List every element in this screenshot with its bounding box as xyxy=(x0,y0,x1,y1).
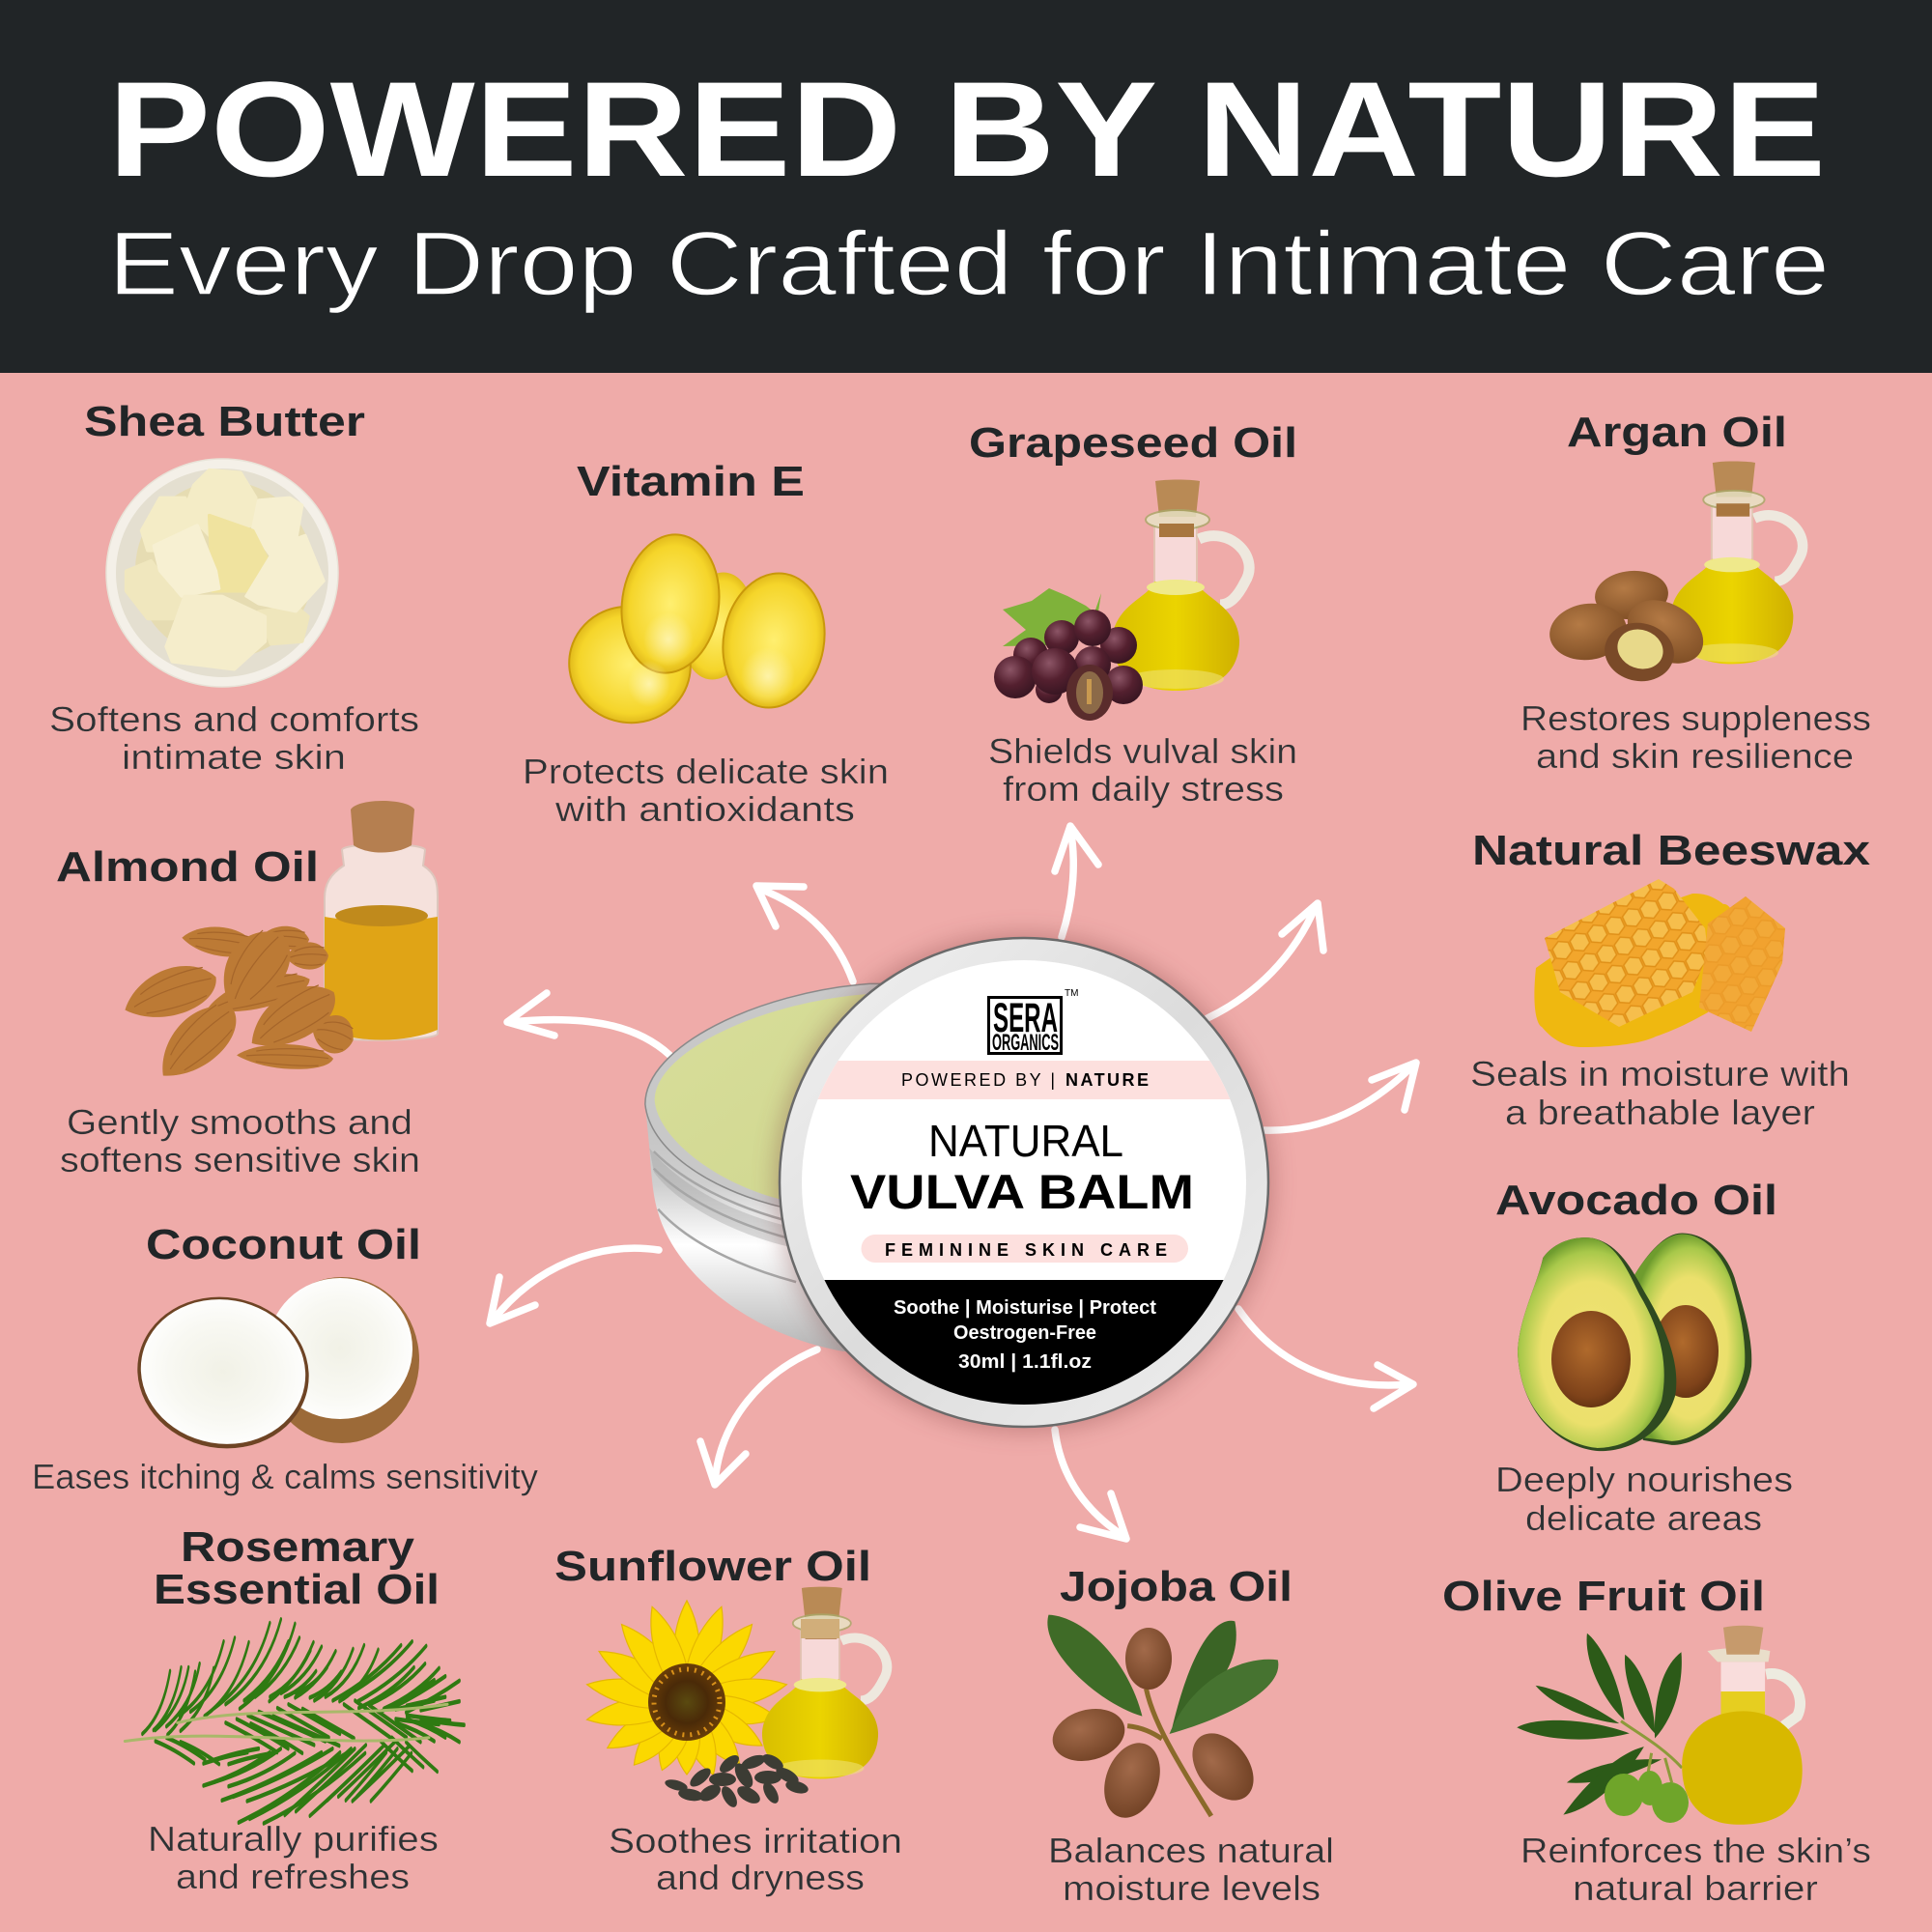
icon: avocado halves xyxy=(1518,1234,1751,1451)
description: Soothes irritation xyxy=(609,1821,902,1861)
heading: Jojoba Oil xyxy=(1060,1563,1293,1610)
heading: Grapeseed Oil xyxy=(969,419,1297,467)
description: and refreshes xyxy=(176,1857,410,1896)
brand logo: ORGANICS xyxy=(992,1030,1059,1056)
icon: almonds and oil jar xyxy=(117,801,438,1092)
label tagline: NATURE xyxy=(1065,1070,1149,1090)
description xyxy=(148,1819,439,1896)
arrow: to argan oil xyxy=(1208,903,1323,1018)
label product name: NATURAL xyxy=(928,1116,1123,1166)
heading: Vitamin E xyxy=(577,458,805,505)
description: and skin resilience xyxy=(1536,736,1854,776)
description: and dryness xyxy=(656,1858,865,1897)
arrow: to vitamin e xyxy=(756,886,853,981)
icon: shea butter bowl xyxy=(106,459,338,687)
heading: Rosemary xyxy=(181,1523,415,1571)
label pill xyxy=(862,1235,1188,1263)
label details: Oestrogen-Free xyxy=(953,1322,1096,1344)
heading: Almond Oil xyxy=(56,843,319,891)
arrow: to jojoba oil xyxy=(1055,1430,1126,1539)
label xyxy=(802,960,1246,1405)
brand logo xyxy=(989,988,1078,1056)
subtitle: Every Drop Crafted for Intimate Care xyxy=(108,213,1830,314)
description: Seals in moisture with xyxy=(1470,1054,1850,1094)
description xyxy=(1495,1460,1793,1538)
panel: sunflower oil xyxy=(554,1543,902,1897)
description: Restores suppleness xyxy=(1520,698,1871,738)
header banner xyxy=(0,0,1932,373)
heading: Essential Oil xyxy=(154,1566,440,1613)
label details: Soothe | Moisturise | Protect xyxy=(894,1297,1156,1319)
panel: olive fruit oil xyxy=(1442,1573,1871,1908)
icon: honeycomb xyxy=(1534,879,1785,1047)
heading: Argan Oil xyxy=(1567,409,1787,456)
description xyxy=(1520,698,1871,776)
title: POWERED BY NATURE xyxy=(108,53,1826,205)
panel: jojoba oil xyxy=(1047,1563,1334,1908)
heading: Natural Beeswax xyxy=(1472,827,1871,874)
description: intimate skin xyxy=(122,737,346,777)
panel: vitamin e xyxy=(523,458,889,829)
brand logo: SERA xyxy=(993,995,1058,1041)
description: from daily stress xyxy=(1003,769,1284,809)
product: balm tin xyxy=(645,933,1275,1432)
description: with antioxidants xyxy=(554,789,855,829)
arrow: to natural beeswax xyxy=(1264,1063,1416,1130)
arrow: to almond oil xyxy=(507,993,669,1055)
label product name: VULVA BALM xyxy=(850,1165,1194,1219)
description: Protects delicate skin xyxy=(523,752,889,791)
description: Eases itching & calms sensitivity xyxy=(32,1457,538,1496)
description: Deeply nourishes xyxy=(1495,1460,1793,1499)
description: softens sensitive skin xyxy=(60,1140,420,1179)
description xyxy=(1470,1054,1850,1132)
label product name xyxy=(850,1116,1194,1219)
label pill: FEMININE SKIN CARE xyxy=(885,1240,1167,1260)
description xyxy=(60,1102,420,1179)
label details xyxy=(894,1297,1156,1373)
icon: coconut halves xyxy=(126,1277,419,1462)
description: moisture levels xyxy=(1063,1868,1321,1908)
panel: shea butter xyxy=(49,398,419,777)
lid shadow xyxy=(775,933,1273,1432)
description xyxy=(523,752,889,829)
description: delicate areas xyxy=(1525,1498,1762,1538)
panel: avocado oil xyxy=(1495,1177,1793,1538)
brand logo: TM xyxy=(1065,988,1078,999)
panel: grapeseed oil xyxy=(969,419,1297,809)
icon: olive branch and oil jug xyxy=(1517,1626,1803,1825)
description xyxy=(988,731,1297,809)
icon: sunflower and oil jug xyxy=(584,1587,887,1809)
description xyxy=(1048,1831,1334,1908)
icon: grapes and oil jug xyxy=(994,479,1249,721)
description: Balances natural xyxy=(1048,1831,1334,1870)
label tagline: POWERED BY | xyxy=(901,1070,1055,1090)
panel: almond oil xyxy=(56,801,438,1179)
description xyxy=(1520,1831,1871,1908)
description: Softens and comforts xyxy=(49,699,419,739)
heading: Sunflower Oil xyxy=(554,1543,871,1590)
icon: argan nuts and oil jug xyxy=(1546,462,1803,687)
description: Reinforces the skin’s xyxy=(1520,1831,1871,1870)
label details: 30ml | 1.1fl.oz xyxy=(958,1351,1092,1373)
heading xyxy=(154,1523,440,1613)
description xyxy=(49,699,419,777)
label tagline xyxy=(901,1070,1149,1090)
icon: vitamin e capsules xyxy=(556,528,835,736)
description: natural barrier xyxy=(1573,1868,1818,1908)
description xyxy=(609,1821,902,1897)
open tin base xyxy=(645,983,973,1351)
arrow: to grapeseed oil xyxy=(1055,826,1098,937)
icon: rosemary sprig xyxy=(125,1619,465,1823)
panel: coconut oil xyxy=(32,1221,538,1496)
description: Naturally purifies xyxy=(148,1819,439,1859)
lid rim xyxy=(780,938,1268,1427)
panel: natural beeswax xyxy=(1470,827,1871,1132)
panel: rosemary essential oil xyxy=(125,1523,465,1896)
heading: Coconut Oil xyxy=(146,1221,421,1268)
panel: argan oil xyxy=(1520,409,1871,776)
arrow: to avocado oil xyxy=(1238,1309,1413,1408)
arrow: to sunflower oil xyxy=(700,1350,817,1485)
description: Gently smooths and xyxy=(67,1102,412,1142)
heading: Shea Butter xyxy=(84,398,365,445)
description: Shields vulval skin xyxy=(988,731,1297,771)
arrow: to coconut oil xyxy=(490,1248,659,1323)
heading: Olive Fruit Oil xyxy=(1442,1573,1765,1620)
description: a breathable layer xyxy=(1505,1093,1815,1132)
icon: jojoba branch xyxy=(1047,1615,1278,1826)
heading: Avocado Oil xyxy=(1495,1177,1777,1224)
